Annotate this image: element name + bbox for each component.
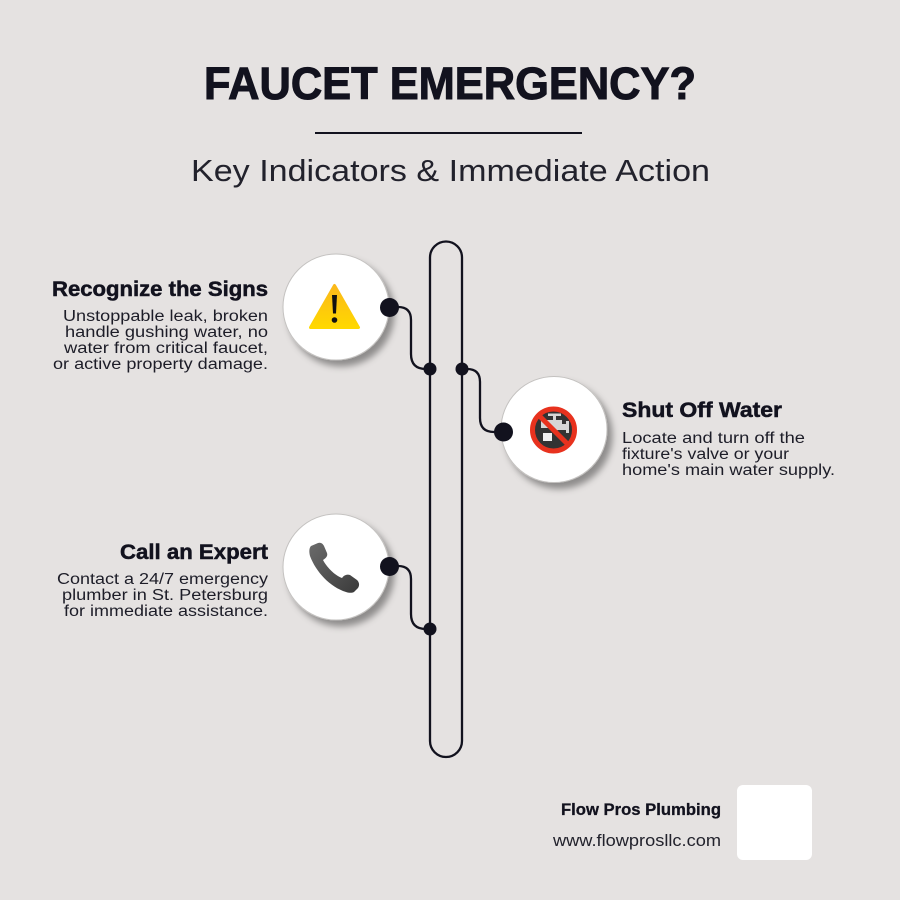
text block: for immediate assistance.: [64, 603, 268, 620]
text block: [53, 308, 268, 373]
icon circle: telephone: [283, 514, 389, 620]
text block: Locate and turn off the: [622, 430, 805, 447]
text block: plumber in St. Petersburg: [62, 587, 268, 604]
text block: home's main water supply.: [622, 462, 835, 479]
text block: Unstoppable leak, broken: [63, 308, 268, 325]
panel: recognize the signs: [52, 254, 389, 373]
connector: shut off water: [456, 362, 503, 432]
heading: Call an Expert: [120, 541, 268, 564]
text block: [622, 430, 835, 479]
connector: recognize the signs: [389, 307, 436, 376]
heading: Recognize the Signs: [52, 278, 268, 301]
connector dot: recognize the signs: [380, 298, 399, 317]
central pipe: [430, 242, 462, 757]
text block: handle gushing water, no: [65, 324, 268, 341]
text block: fixture's valve or your: [622, 446, 789, 463]
icon circle: no water: [501, 376, 607, 482]
connector dot: [494, 422, 513, 442]
text block: water from critical faucet,: [63, 340, 268, 357]
text block: Contact a 24/7 emergency: [57, 571, 268, 588]
heading: Shut Off Water: [622, 399, 782, 422]
footer: website: www.flowprosllc.com: [552, 832, 721, 850]
icon circle: warning: [283, 254, 389, 360]
subtitle: Key Indicators & Immediate Action: [191, 153, 710, 188]
connector dot: [380, 557, 399, 576]
panel: shut off water: [494, 376, 835, 482]
text block: [57, 571, 268, 620]
panel: call an expert: [57, 514, 399, 620]
title: FAUCET EMERGENCY?: [204, 58, 696, 109]
connector: call an expert: [389, 566, 436, 636]
footer: company name: Flow Pros Plumbing: [561, 801, 721, 819]
text block: or active property damage.: [53, 356, 268, 373]
footer: logo placeholder: [737, 785, 812, 860]
